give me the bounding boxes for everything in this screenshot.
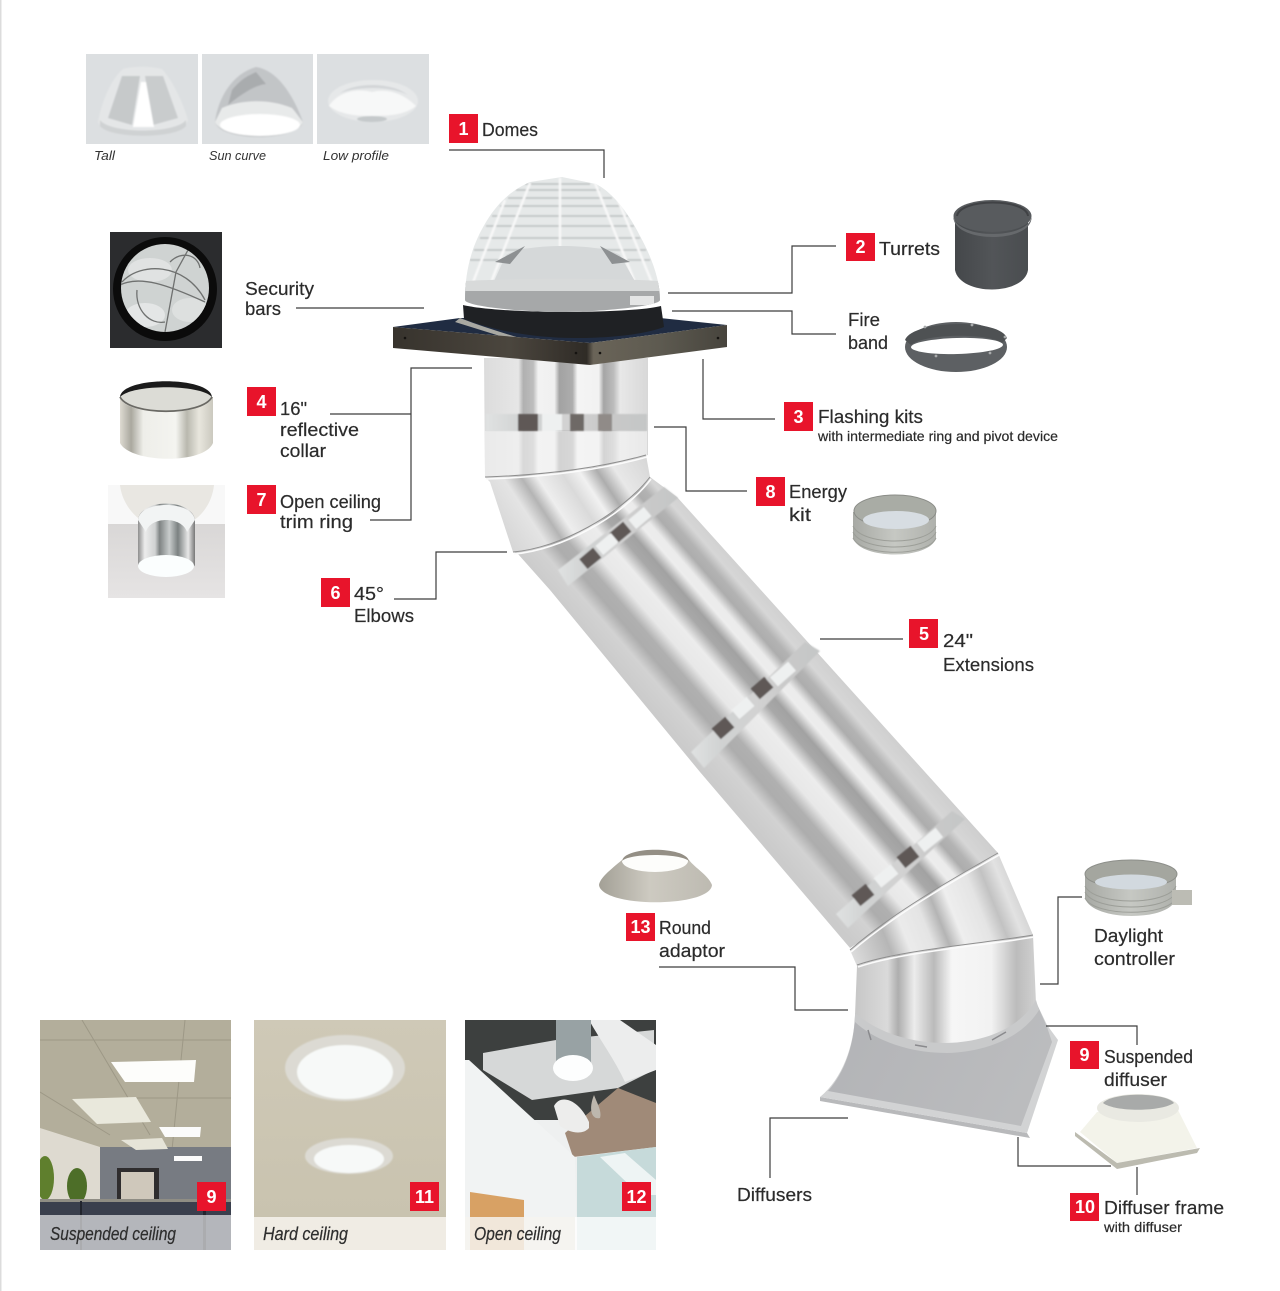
label: Security bars: bars (245, 298, 281, 319)
number badge 11 (410, 1182, 439, 1211)
label 4: 16 inch reflective collar (247, 387, 359, 461)
label 2: Turrets: Turrets (879, 238, 940, 259)
label 3: Flashing kits: Flashing kits (818, 406, 923, 427)
label 13: Round adaptor: Round (659, 917, 711, 938)
panel: hard ceiling photo (254, 1020, 446, 1250)
label 7: Open ceiling trim ring: trim ring (280, 511, 353, 532)
panel: round adaptor product (599, 850, 712, 902)
panel: dome type thumbnails (86, 54, 429, 163)
dark curb (463, 305, 664, 338)
tall dome and flashing (393, 170, 727, 365)
label 5: 24 inch Extensions: 24" (943, 630, 973, 651)
label 10: Diffuser frame: Diffuser frame (1104, 1197, 1224, 1218)
panel: energy kit product (853, 495, 936, 554)
caption: Tall: Tall (94, 148, 116, 163)
caption bar (40, 1215, 231, 1250)
main duct assembly (393, 170, 1058, 1138)
caption bar (254, 1217, 446, 1250)
caption: Suspended ceiling: Suspended ceiling (50, 1224, 176, 1244)
label 1: Domes: 1 (458, 119, 469, 139)
caption: Open ceiling: Open ceiling (474, 1224, 561, 1244)
label 9: Suspended diffuser: diffuser (1104, 1069, 1167, 1090)
label 10: Diffuser frame: with diffuser (1103, 1219, 1182, 1235)
flashing plate face (393, 325, 727, 365)
label 4: 16 inch reflective collar: collar (280, 440, 326, 461)
flashing plate top (393, 318, 727, 343)
label 9: Suspended diffuser (1070, 1041, 1193, 1090)
label 8: Energy kit (756, 477, 848, 525)
label: Fire band: band (848, 332, 888, 353)
label 13: Round adaptor (626, 913, 725, 961)
label 5: 24 inch Extensions: 5 (919, 624, 929, 644)
label 2: Turrets (846, 233, 940, 261)
caption: Sun curve: Sun curve (209, 148, 266, 163)
panel: security bars photo (110, 232, 222, 348)
long diagonal extension tube (513, 477, 998, 948)
lower collar cylinder (855, 935, 1036, 1045)
panel: reflective collar product (120, 381, 213, 459)
label 2: Turrets: 2 (855, 237, 866, 257)
label: Daylight controller (1094, 925, 1175, 969)
thumbnail: low profile dome (317, 54, 429, 144)
label 8: Energy kit: 8 (765, 482, 776, 502)
panel: open ceiling trim ring photo (108, 485, 225, 598)
label 3: Flashing kits: 3 (793, 407, 804, 427)
leader lines (296, 150, 1137, 1195)
label: Security bars: Security (245, 278, 315, 299)
label 8: Energy kit: kit (789, 504, 811, 525)
label: Fire band (848, 309, 888, 353)
label 6: 45 degree Elbows (321, 578, 414, 626)
label 1: Domes (449, 114, 538, 143)
caption: Hard ceiling: Hard ceiling (263, 1224, 348, 1244)
label 3: Flashing kits (784, 402, 1058, 444)
label 7: Open ceiling trim ring (247, 485, 381, 532)
panel: open ceiling photo (465, 1020, 656, 1250)
label 3: Flashing kits: with intermediate ring and pivot device (817, 428, 1058, 444)
foil tape bands (486, 414, 965, 928)
number badge 11: 11 (415, 1187, 434, 1207)
diffuser body (820, 1000, 1058, 1138)
upper collar cylinder (484, 358, 648, 477)
number badge 12 (622, 1182, 651, 1211)
panel: suspended diffuser product (1075, 1094, 1200, 1169)
number badge 9 (197, 1182, 226, 1211)
panel: suspended ceiling photo (36, 1020, 231, 1250)
label 4: 16 inch reflective collar: 4 (256, 392, 267, 412)
thumbnail: tall dome (86, 54, 198, 144)
label 6: 45 degree Elbows: 6 (330, 583, 341, 603)
thumbnail: sun curve dome (202, 54, 313, 144)
number badge 12: 12 (626, 1187, 647, 1207)
dome shell (465, 177, 660, 312)
label 1: Domes: Domes (482, 119, 538, 140)
plate fastener dots (404, 337, 719, 354)
label 13: Round adaptor: 13 (630, 917, 651, 937)
caption bar (465, 1217, 575, 1250)
label: Daylight controller: controller (1094, 948, 1175, 969)
label: Diffusers: Diffusers (737, 1184, 812, 1205)
label 9: Suspended diffuser: 9 (1079, 1045, 1090, 1065)
label 4: 16 inch reflective collar: 16" (280, 398, 307, 419)
label 6: 45 degree Elbows: 45° (354, 583, 384, 604)
label: Security bars (245, 278, 315, 319)
foil dark and bright patches (518, 414, 919, 906)
label 10: Diffuser frame: 10 (1075, 1197, 1095, 1217)
label 13: Round adaptor: adaptor (659, 940, 725, 961)
panel: turret product (954, 200, 1032, 290)
label: Daylight controller: Daylight (1094, 925, 1163, 946)
label 7: Open ceiling trim ring: Open ceiling (280, 491, 381, 512)
caption: Low profile: Low profile (323, 148, 389, 163)
upper elbow segment (485, 455, 650, 552)
label 5: 24 inch Extensions (909, 619, 1034, 675)
label 8: Energy kit: Energy (789, 481, 848, 502)
label 9: Suspended diffuser: Suspended (1104, 1046, 1193, 1067)
label 7: Open ceiling trim ring: 7 (256, 490, 267, 510)
lower elbow segment (850, 853, 1033, 966)
label 4: 16 inch reflective collar: reflective (280, 419, 359, 440)
label 6: 45 degree Elbows: Elbows (354, 605, 414, 626)
label: Fire band: Fire (848, 309, 880, 330)
label 5: 24 inch Extensions: Extensions (943, 654, 1034, 675)
number badge 9: 9 (206, 1187, 217, 1207)
label 10: Diffuser frame (1070, 1193, 1224, 1235)
panel: fire band product (905, 322, 1007, 372)
seams (485, 455, 1034, 967)
panel: daylight controller product (1085, 860, 1192, 916)
